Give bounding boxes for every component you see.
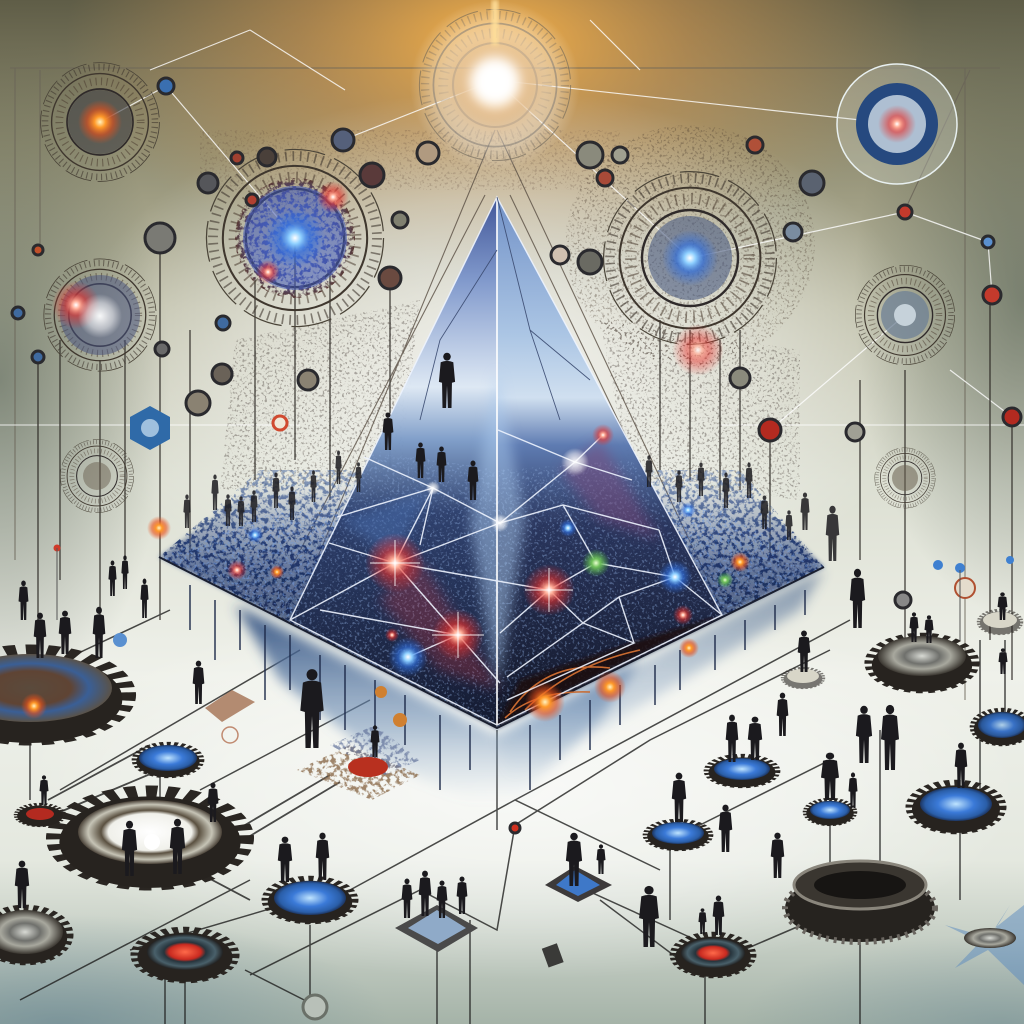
central top sun ring <box>410 0 580 170</box>
gear: blue disc left <box>136 744 200 777</box>
light sparkles <box>147 424 750 722</box>
gear: small red left <box>17 804 63 827</box>
gear: right metal <box>871 636 973 692</box>
people: crowd on back edge <box>183 450 839 561</box>
person: tall foreground figure <box>300 669 324 748</box>
orb: centre right <box>604 172 776 376</box>
gear: right blue <box>911 783 1001 833</box>
gear: large left <box>57 791 243 888</box>
machinery patch <box>205 690 420 800</box>
gear: far right blue <box>973 710 1024 745</box>
gear: small near walkway <box>783 668 823 689</box>
pyramid right face <box>497 197 722 725</box>
pyramid <box>290 197 722 725</box>
gear: bottom left metal <box>0 908 68 964</box>
gear: bottom red <box>136 930 234 982</box>
people: left field <box>15 555 218 908</box>
under-platform blue shade and drips <box>190 570 824 800</box>
hexagon icon <box>130 406 170 450</box>
gear: bottom red right <box>674 934 752 977</box>
people: right field <box>672 569 1008 878</box>
orb: right <box>855 265 955 365</box>
gear: far right small <box>979 610 1021 634</box>
gear: blue centre right <box>708 756 776 787</box>
sketchy debris clouds <box>200 125 815 500</box>
small node icons <box>12 78 1021 833</box>
starburst bottom right <box>945 905 1024 985</box>
orb: top right <box>837 64 957 184</box>
gear: blue under walkway <box>646 821 710 850</box>
tiny coloured pins <box>54 544 1014 727</box>
gear: far left large <box>0 650 124 743</box>
gear: large dark bottom right <box>785 861 935 942</box>
orb: top left <box>41 63 159 181</box>
small pedestals <box>303 866 612 1019</box>
people: centre foreground <box>278 725 724 947</box>
orb: large left <box>206 149 384 327</box>
gear: bottom blue <box>267 878 353 923</box>
gear: small blue right <box>806 799 854 825</box>
pyramid lower-right ember <box>497 615 722 725</box>
orb: mid left <box>44 259 156 371</box>
orb: lower right <box>875 448 935 508</box>
people: figures on pyramid <box>383 353 478 500</box>
orb: lower left <box>60 439 134 513</box>
pyramid glass texture <box>290 450 722 725</box>
platform <box>159 470 824 728</box>
pyramid facets <box>290 197 722 725</box>
pyramid left face <box>290 197 497 725</box>
